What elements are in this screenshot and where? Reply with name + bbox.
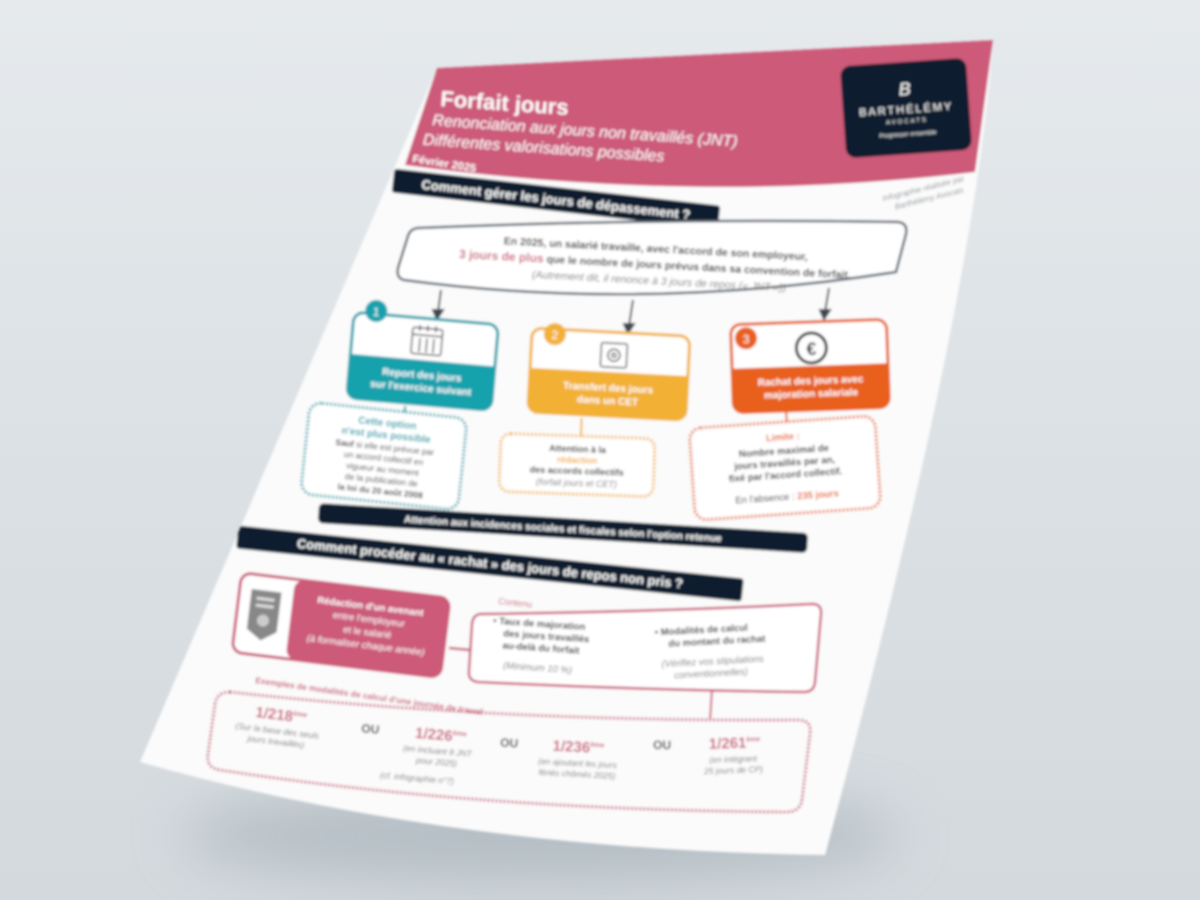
credit note: Barthélémy Avocats: [894, 186, 965, 211]
content box: [469, 604, 821, 692]
example 3: 1/236: [552, 738, 591, 757]
situation box: En 2025, un salarié travaille, avec l'accord de son employeur,: [503, 235, 808, 263]
option 3 card: Rachat des jours avec: [758, 374, 864, 389]
title: Forfait jours: [440, 86, 569, 120]
section heading 1: Comment gérer les jours de dépassement ?: [421, 177, 691, 222]
logo: BARTHÉLÉMY: [859, 100, 954, 119]
example 2: pour 2025): [415, 755, 458, 769]
note 3: [688, 404, 881, 520]
example 3: (en ajoutant les jours: [538, 756, 618, 770]
icon: document with seal: [246, 589, 282, 642]
example 2: 1/226: [414, 725, 453, 745]
option 1 card: Report des jours: [382, 367, 462, 385]
note 1: Sauf si elle est prévue par: [335, 437, 435, 457]
note 3: Nombre maximal de: [738, 443, 829, 460]
connector: [449, 648, 470, 650]
content box: au-delà du forfait: [502, 640, 581, 657]
note 2: rédaction: [557, 454, 598, 466]
example 2: ème: [453, 730, 467, 738]
content box: conventionnelles): [674, 667, 748, 681]
example 4: 1/261: [709, 735, 747, 753]
example 1: jours travaillés): [246, 733, 305, 750]
connector down: [710, 690, 712, 720]
icon: calendar: [411, 324, 443, 356]
option 2 card: dans un CET: [577, 394, 638, 409]
content box: des jours travaillés: [503, 628, 590, 645]
section heading 1: [392, 169, 720, 230]
logo: Progresser ensemble: [879, 130, 937, 140]
example 1: [234, 706, 320, 750]
note 2: des accords collectifs: [530, 464, 624, 478]
example 1: 1/218: [255, 704, 294, 725]
icon: euro: €: [806, 339, 817, 359]
arrows: [433, 288, 830, 333]
amendment box: [232, 573, 450, 678]
example 2: (cf. infographie n°7): [380, 770, 455, 786]
content box: • Modalités de calcul: [655, 623, 748, 638]
option 1 card: 1: [372, 305, 380, 319]
option 1 card: sur l'exercice suivant: [370, 379, 472, 399]
note 2: (forfait jours et CET): [536, 477, 617, 489]
OU 1: OU: [361, 721, 380, 737]
example 3: ème: [590, 742, 605, 749]
header band: [405, 40, 993, 187]
note 2: [499, 415, 656, 497]
example 4: ème: [746, 736, 760, 744]
option 2 card: [528, 322, 690, 420]
content box: • Taux de majoration: [493, 616, 586, 633]
note 3: fixé par l'accord collectif.: [728, 466, 843, 485]
subtitle: Renonciation aux jours non travaillés (JNT): [432, 112, 738, 151]
note 1: [301, 396, 468, 510]
content box: (Vérifiez vos stipulations: [661, 654, 764, 670]
example 3: fériés chômés 2025): [538, 767, 616, 781]
warning bar: [318, 503, 808, 553]
examples dotted box: [208, 692, 810, 812]
note 1: n'est plus possible: [341, 426, 432, 446]
example 1: (Sur la base des seuls: [235, 721, 320, 741]
note 2: Attention à la: [549, 443, 607, 455]
example 2: [380, 722, 475, 788]
date: Février 2025: [412, 153, 477, 175]
option 3 card: majoration salariale: [764, 387, 859, 402]
note 3: En l'absence : 235 jours: [735, 488, 839, 507]
logo: B: [898, 79, 911, 99]
content box: du montant du rachat: [668, 634, 767, 650]
example 4: 25 jours de CP): [703, 764, 763, 776]
option 3 card: 3: [742, 332, 750, 346]
amendment box: Rédaction d'un avenant: [317, 595, 425, 619]
logo: [840, 58, 972, 158]
amendment box: entre l'employeur: [332, 610, 406, 630]
option 1 card: [347, 298, 500, 410]
OU 2: OU: [500, 736, 519, 750]
icon: euro: [796, 332, 827, 363]
option 3 card: [731, 319, 889, 413]
example 3: [537, 737, 619, 781]
example 1: ème: [293, 711, 308, 719]
situation box: [398, 221, 906, 297]
example 4: (en intégrant: [709, 753, 758, 765]
paper shadow: [180, 790, 900, 880]
logo: AVOCATS: [886, 118, 928, 126]
amendment box: (à formaliser chaque année): [306, 633, 425, 658]
examples title: Exemples de modalités de calcul d'une journée de travail: [255, 675, 484, 717]
note 1: un accord collectif en: [343, 449, 424, 467]
example 4: [702, 734, 763, 776]
subtitle: Différentes valorisations possibles: [422, 132, 665, 166]
warning bar: Attention aux incidences sociales et fiscales selon l'option retenue: [404, 514, 722, 545]
option 2 card: Transfert des jours: [563, 381, 654, 396]
content box: (Minimum 10 %): [503, 660, 572, 676]
amendment box: et le salarié: [342, 624, 392, 641]
note 1: vigueur au moment: [346, 460, 420, 478]
credit note: Infographie réalisée par: [881, 174, 965, 203]
OU 3: OU: [653, 738, 671, 752]
section heading 2: [236, 526, 744, 601]
paper sheet: [140, 40, 993, 855]
example 2: (en incluant 8 JNT: [403, 743, 473, 759]
icon: safe: [600, 343, 627, 368]
situation box: 3 jours de plus que le nombre de jours prévus dans sa convention de forfait.: [459, 247, 851, 282]
content label: Contenu: [498, 596, 533, 610]
option 2 card: 2: [551, 328, 559, 342]
section heading 2: Comment procéder au « rachat » des jours de repos non pris ?: [296, 536, 684, 591]
note 1: la loi du 20 août 2008: [337, 481, 424, 500]
note 3: Limite :: [766, 431, 800, 444]
note 3: jours travaillés par an,: [733, 455, 835, 473]
note 1: Cette option: [358, 415, 417, 432]
situation box: (Autrement dit, il renonce à 3 jours de repos (« JNT »)): [532, 269, 786, 294]
note 1: de la publication de: [344, 471, 419, 489]
